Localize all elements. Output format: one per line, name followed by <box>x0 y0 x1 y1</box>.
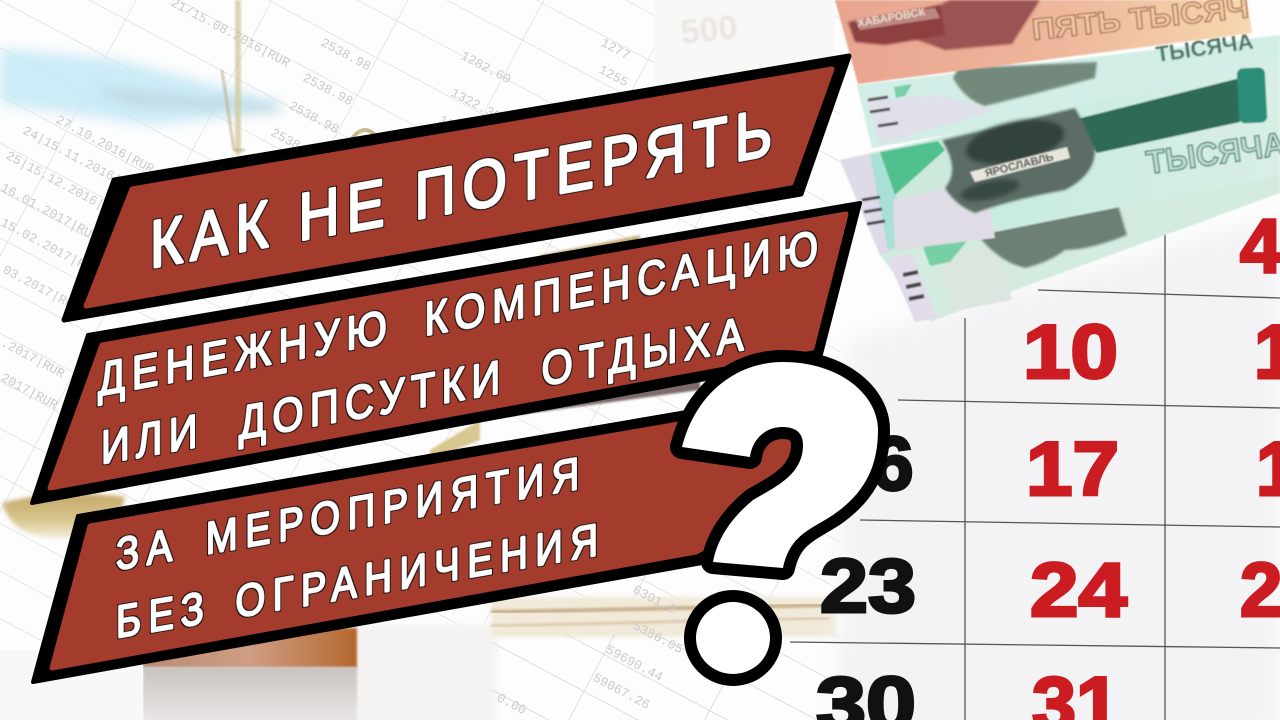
background: spreadsheet paper: 2538.98 <box>300 70 355 109</box>
banknote: upper 1000: ТЫСЯЧА <box>1154 29 1255 67</box>
background: spreadsheet paper: 2538.98 <box>286 98 341 137</box>
background: white books and wooden base: 0.00 <box>494 690 529 718</box>
banknote: 5000: ХАБАРОВСК <box>856 6 926 30</box>
background: white books and wooden base: 59690.44 <box>603 642 665 685</box>
banknote: 5000 <box>835 0 1252 84</box>
background: white books and wooden base: 6301.2 <box>630 582 678 618</box>
calendar <box>790 204 1280 720</box>
background: blurred blue pen <box>0 48 280 125</box>
background: spreadsheet paper: 24|15.11.2016|RUR <box>20 123 144 199</box>
background: faded document corner: 500 <box>679 8 739 52</box>
background: spreadsheet paper: 2538.98 <box>318 35 373 74</box>
calendar date numbers: 23 <box>820 544 916 629</box>
background: white books and wooden base: 59067.26 <box>590 670 652 713</box>
calendar date numbers: 16 <box>829 422 914 507</box>
calendar date numbers: 10 <box>1023 310 1118 395</box>
background: spreadsheet paper: 1255 <box>596 62 631 90</box>
background: faded brass scale <box>2 0 375 538</box>
banknote: upper 1000 <box>857 29 1280 148</box>
background: spreadsheet paper: 15.02.2017|RUR <box>0 215 102 280</box>
background: faded document corner <box>655 0 835 90</box>
text: или допсутки отдыха: ИЛИ ДОПСУТКИ ОТДЫХА <box>101 308 744 475</box>
background: spreadsheet paper: .2017|RUR <box>0 335 67 382</box>
title: как не потерять: КАК НЕ ПОТЕРЯТЬ <box>150 95 772 283</box>
background: spreadsheet paper: 1322.35 <box>448 85 503 124</box>
background: spreadsheet paper: 16.01.2017|RUR <box>0 180 102 245</box>
text: за мероприятия: ЗА МЕРОПРИЯТИЯ <box>116 448 579 580</box>
background: spreadsheet paper: 27.10.2016|RUR <box>53 112 157 177</box>
background: spreadsheet paper: 1342 <box>436 112 471 140</box>
text: денежную компенсацию: ДЕНЕЖНУЮ КОМПЕНСАЦИЮ <box>98 221 818 407</box>
background: white books and wooden base: 5386.05 <box>630 618 685 657</box>
banner: line 1 block <box>64 56 849 320</box>
banknote: middle 1000 <box>840 60 1280 255</box>
background: spreadsheet paper: 1277 <box>598 35 633 63</box>
icon: question mark <box>682 362 878 674</box>
background: spreadsheet paper: 03.2017|RUR <box>0 262 83 316</box>
calendar date numbers: 17 <box>1026 427 1119 512</box>
text: без ограничения: БЕЗ ОГРАНИЧЕНИЯ <box>116 515 598 648</box>
banknote: middle 1000: ЯРОСЛАВЛЬ <box>984 151 1055 180</box>
background: dark scale centre object <box>430 235 700 460</box>
banknotes <box>835 0 1280 322</box>
background: spreadsheet paper: 2538 <box>268 125 303 153</box>
banner: line 3 block <box>33 390 815 682</box>
background: spreadsheet paper: 25|15.12.2016|RUR <box>3 148 127 224</box>
banner: line 2 block <box>32 203 860 503</box>
banknote: lower 1000 <box>880 175 1280 322</box>
background: spreadsheet paper: 1282.60 <box>458 48 513 87</box>
background: white books and wooden base <box>0 582 836 720</box>
calendar date numbers <box>816 204 1280 720</box>
calendar date numbers: 24 <box>1030 548 1127 633</box>
